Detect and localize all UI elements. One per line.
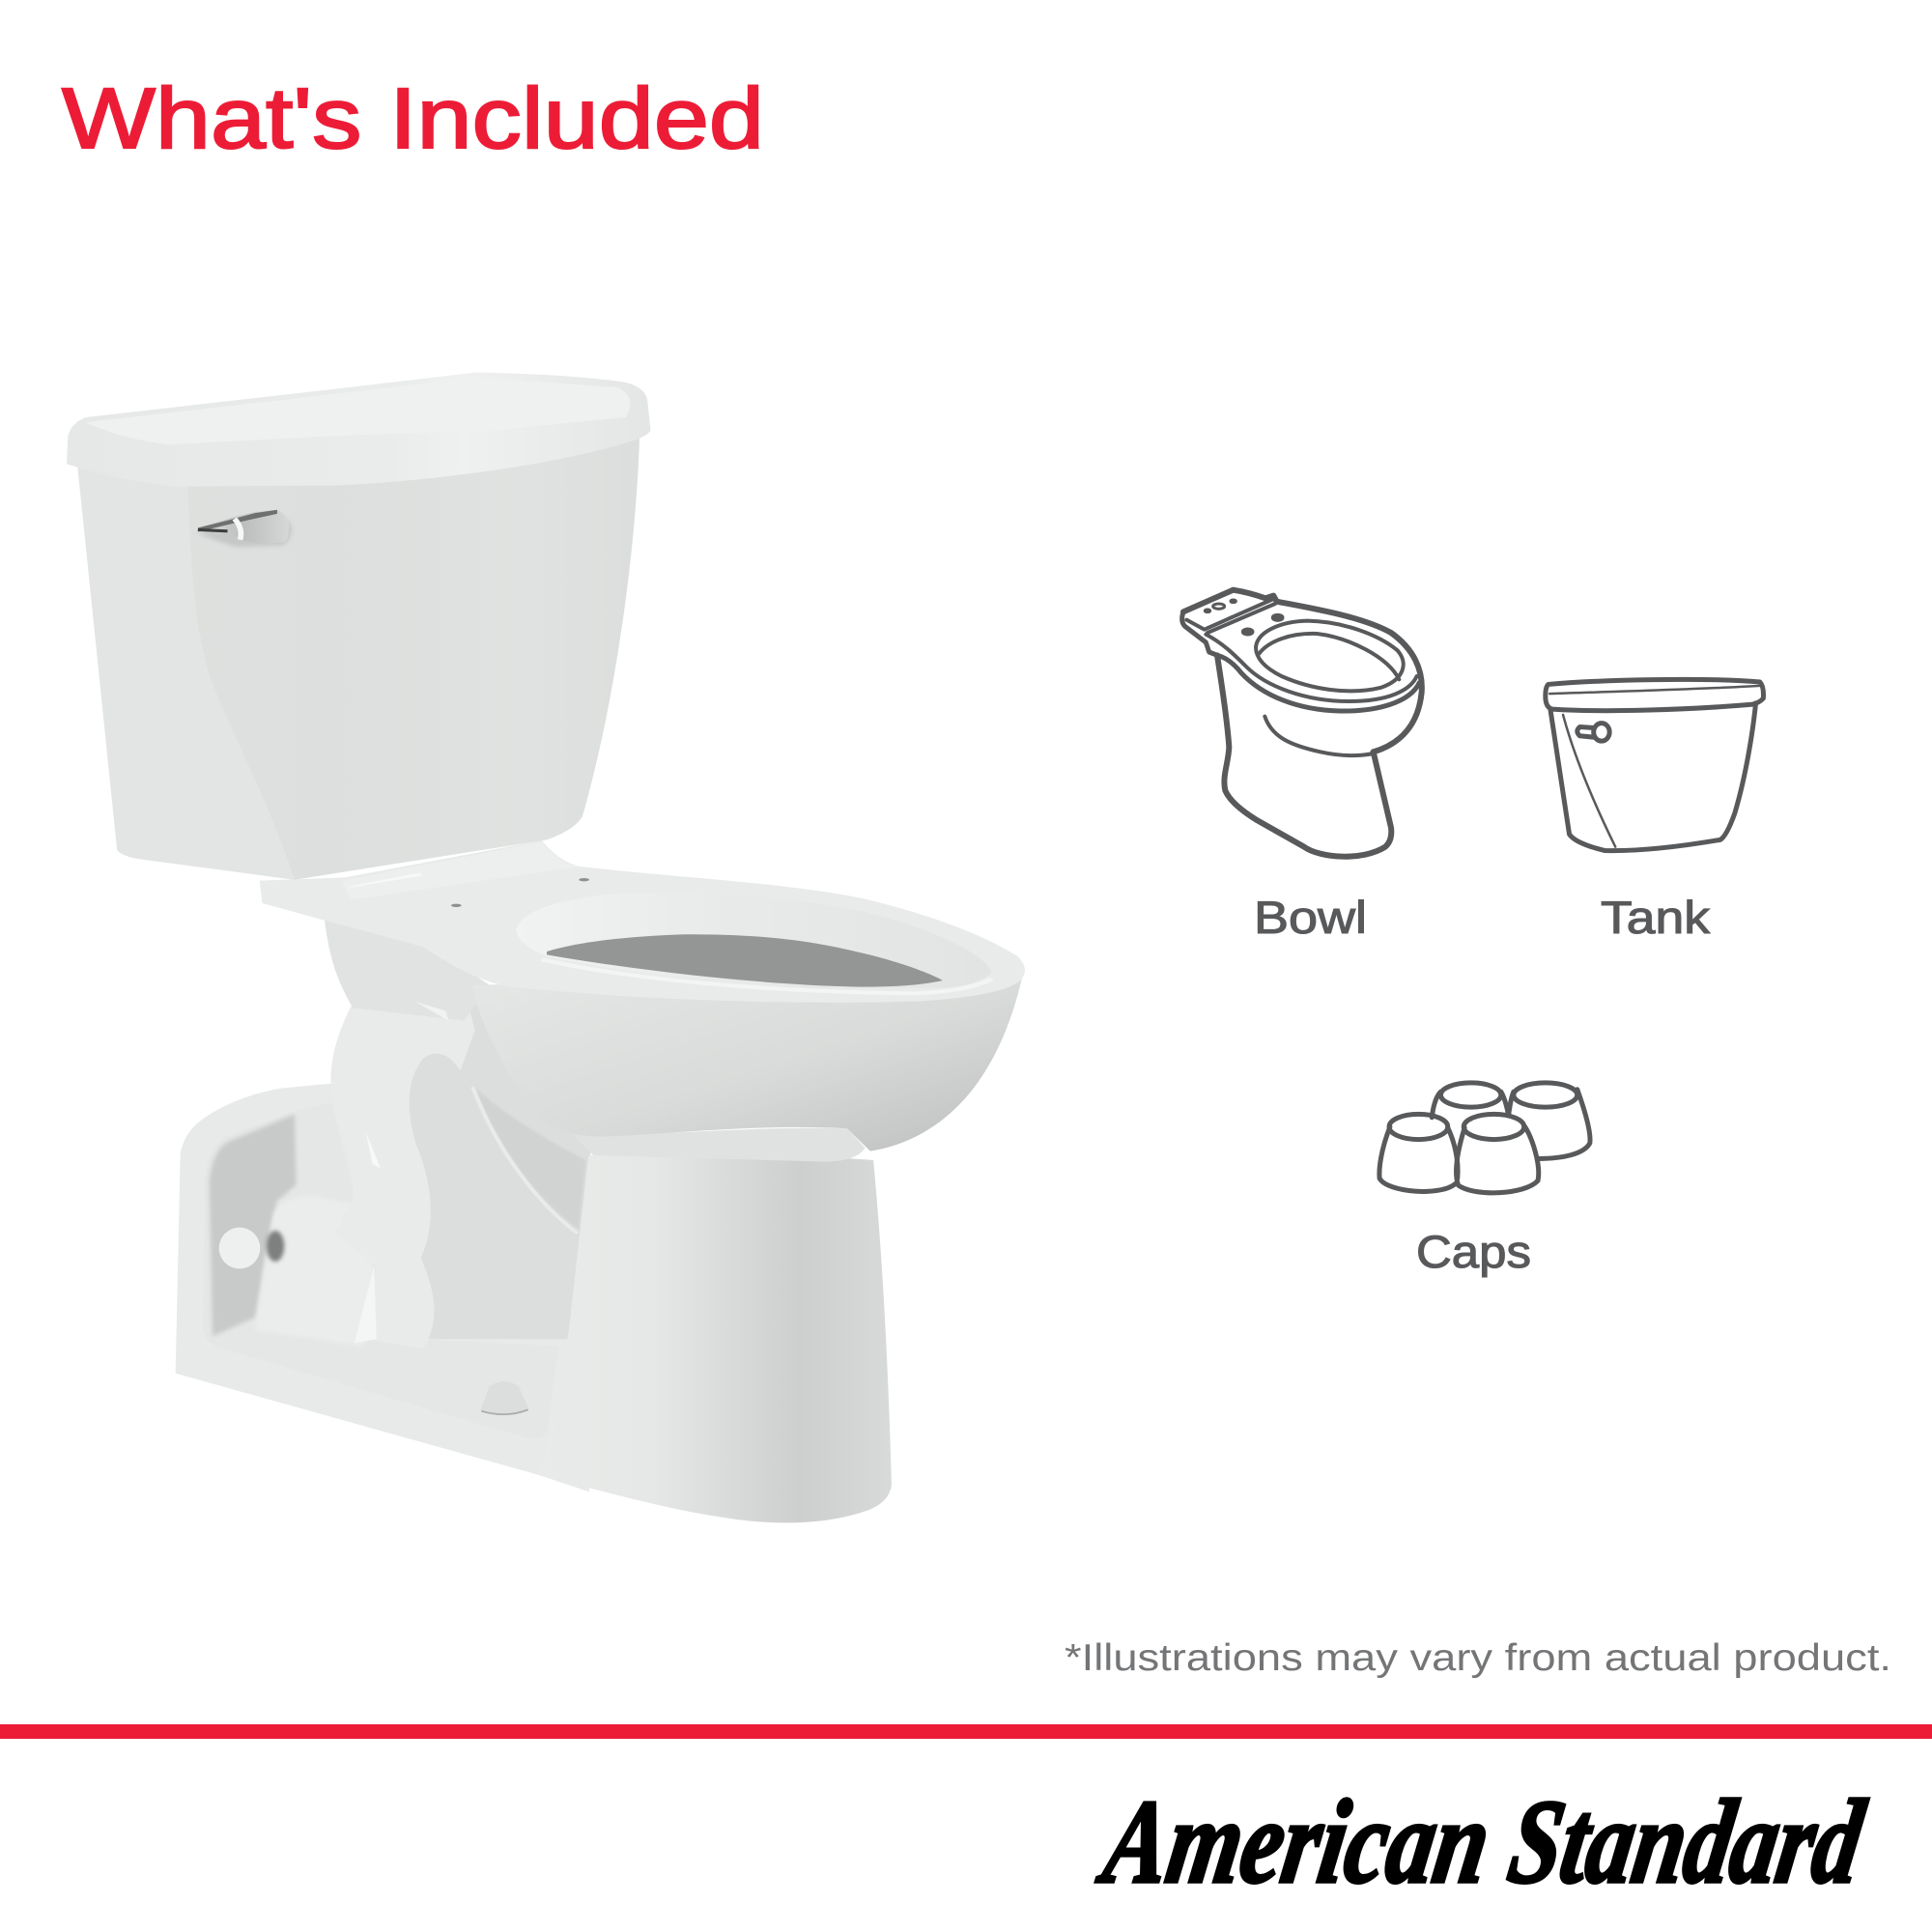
rim lip highlight [542,959,992,993]
tank body [77,438,639,880]
product photo: toilet [67,372,1025,1522]
shaded wedge below bowl [475,1087,586,1230]
footnote: *Illustrations may vary from actual product. [1065,1637,1891,1679]
water surface [547,934,943,987]
rim and deck [260,840,1025,1003]
tank lid [67,372,651,487]
icon: bowl [1182,590,1422,857]
seat mounting holes [451,878,589,907]
label: bowl: Bowl [1254,892,1367,943]
skirt [176,1082,589,1492]
bowl interior [516,894,992,988]
icon: caps [1379,1083,1590,1193]
bowl exterior [471,969,1024,1151]
floor bolt cap [480,1381,528,1415]
icon: tank [1546,679,1763,851]
logo: American Standard [1091,1776,1873,1908]
pipe [330,978,475,1350]
flush lever [197,510,292,547]
toilet tank [67,372,651,880]
side bolt cap [217,1226,284,1271]
toilet lower base [176,1082,589,1492]
ledge [573,1128,866,1162]
underlay [352,969,591,1339]
label: caps: Caps [1416,1226,1531,1277]
red divider bar [0,1724,1932,1739]
rear dome [325,918,490,1021]
toilet bowl [260,840,1025,1162]
label: tank: Tank [1601,892,1711,943]
toilet pedestal [539,1144,892,1522]
logo: American Standard: American [1091,1776,1498,1908]
toilet trapway and centre panel [330,969,591,1350]
recess [203,1103,558,1439]
tank left side panel [77,468,295,880]
title: What's Included [62,70,764,166]
